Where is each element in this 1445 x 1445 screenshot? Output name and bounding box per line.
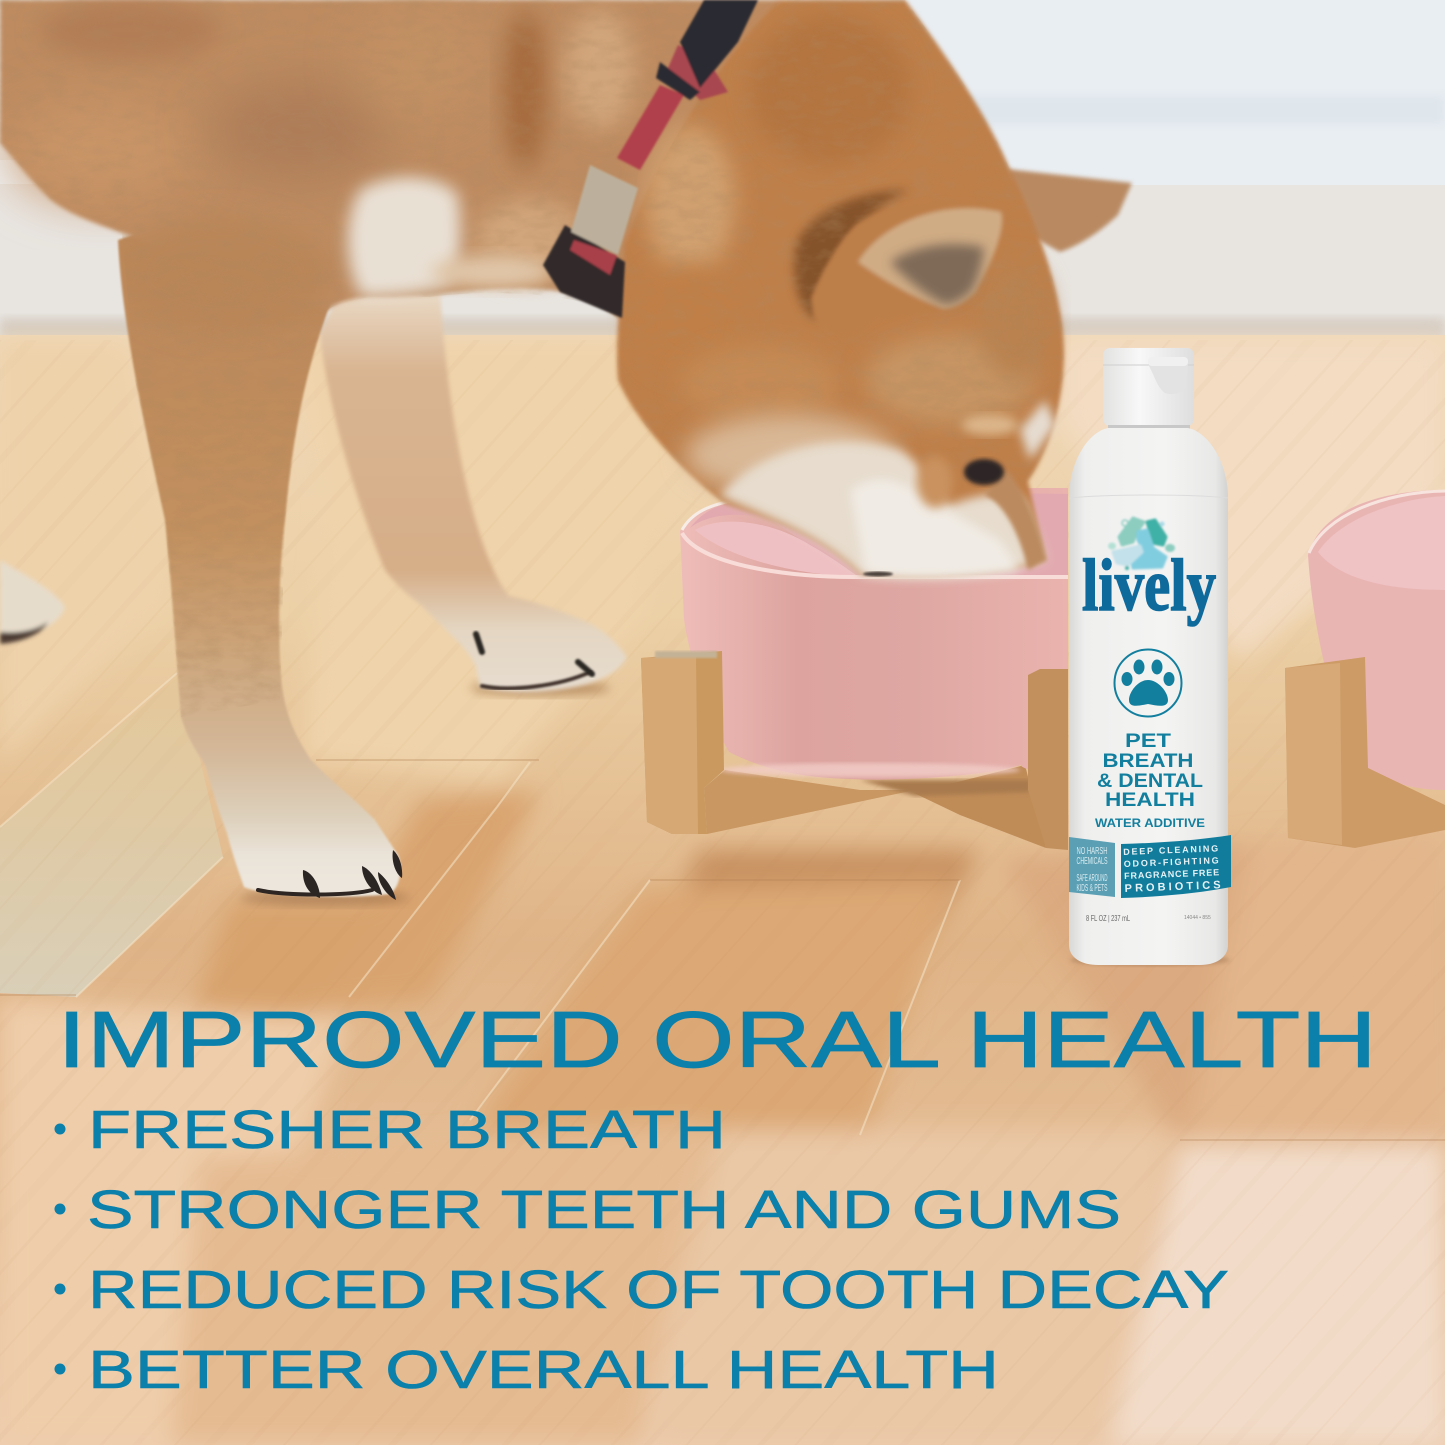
bottle shadow <box>1070 954 1230 966</box>
product title: WATER ADDITIVE <box>1095 816 1205 830</box>
benefit: better overall health: BETTER OVERALL HEALTH <box>88 1340 999 1400</box>
product bottle <box>1069 348 1231 966</box>
pink bowl left <box>680 488 1068 780</box>
dog eye <box>964 459 1004 485</box>
label band: benefits: DEEP CLEANING <box>1123 843 1218 857</box>
logo: lively wordmark: lively <box>1082 545 1216 627</box>
label band: safety claims <box>1069 837 1115 897</box>
dog: body <box>0 0 780 720</box>
product title: PET <box>1125 731 1171 752</box>
collar lower red band <box>570 240 617 275</box>
icon: paw in circle <box>1114 650 1182 716</box>
label band: safety claims: SAFE AROUND <box>1076 873 1108 884</box>
wood grain <box>0 340 1445 1445</box>
label band: safety claims: CHEMICALS <box>1076 856 1108 867</box>
far-left paw <box>0 560 65 644</box>
dog: rear leg <box>320 290 627 696</box>
product title: HEALTH <box>1105 790 1195 811</box>
wooden stand posts left <box>641 651 1068 850</box>
headline: IMPROVED ORAL HEALTH <box>57 995 1377 1084</box>
bottle body <box>1069 428 1228 965</box>
small print: 14044 • 855 <box>1184 915 1211 921</box>
product title: & DENTAL <box>1097 771 1203 792</box>
background: wall and window <box>0 0 1445 340</box>
label band: benefits: ODOR-FIGHTING <box>1124 855 1219 869</box>
dog ear <box>811 200 1007 339</box>
wooden stand beams left <box>704 765 1046 848</box>
dog: head <box>610 0 1132 577</box>
label band: benefits <box>1121 835 1231 898</box>
product title <box>1095 731 1205 830</box>
benefit: fresher breath: FRESHER BREATH <box>88 1100 726 1160</box>
collar upper red band <box>617 85 684 170</box>
volume text: 8 FL OZ | 237 mL <box>1086 914 1130 923</box>
collar lower dark strap <box>543 225 625 318</box>
claws <box>303 850 402 900</box>
white muzzle <box>720 442 1046 577</box>
label band: safety claims: NO HARSH <box>1076 846 1108 857</box>
benefit: reduced risk of tooth decay: REDUCED RISK OF TOOTH DECAY <box>88 1260 1229 1320</box>
label band: benefits: PROBIOTICS <box>1124 879 1221 895</box>
label band: safety claims: KIDS & PETS <box>1076 883 1108 894</box>
benefit: stronger teeth and gums: STRONGER TEETH AND GUMS <box>87 1180 1121 1240</box>
wooden stand right <box>1285 657 1445 848</box>
pale sheen strip on the left of the floor <box>0 675 223 997</box>
dog: front leg <box>118 200 410 906</box>
nose in bowl <box>863 572 893 576</box>
logo: lively bubbles <box>1108 518 1175 570</box>
bottle cap <box>1103 348 1194 430</box>
dog collar <box>543 0 758 318</box>
collar dark buckles <box>656 62 700 100</box>
product title: BREATH <box>1102 751 1194 772</box>
background: wooden floor <box>0 335 1445 1445</box>
cream throat <box>685 415 895 495</box>
fur texture on head <box>646 0 1008 428</box>
white chest patch <box>348 177 460 297</box>
shoulder blending body into front leg <box>122 234 308 296</box>
collar tag <box>571 165 638 255</box>
fur texture on body <box>0 0 720 720</box>
pink bowl right <box>1308 490 1445 790</box>
label band: benefits: FRAGRANCE FREE <box>1124 867 1219 881</box>
